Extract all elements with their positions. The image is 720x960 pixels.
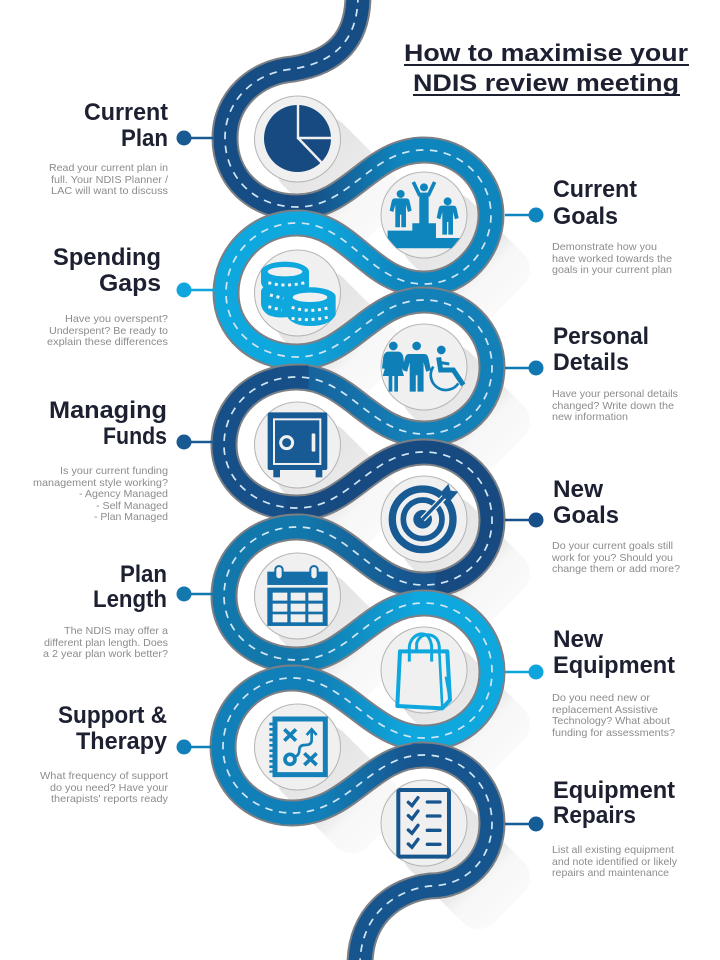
panel: equipment repairs: List all existing equipment xyxy=(552,844,674,856)
panel: new goals: New xyxy=(553,476,603,503)
panel: support and therapy: What frequency of support xyxy=(40,770,168,782)
panel: equipment repairs: Repairs xyxy=(553,802,636,829)
icon: strategy board xyxy=(271,719,325,775)
panel: plan length xyxy=(43,561,215,660)
panel: new goals: change them or add more? xyxy=(552,563,680,575)
panel: plan length: a 2 year plan work better? xyxy=(43,648,168,660)
panel: managing funds: - Self Managed xyxy=(96,500,168,512)
panel: new goals xyxy=(505,476,680,575)
panel: personal details: changed? Write down the xyxy=(552,400,674,412)
panel: support and therapy xyxy=(40,702,215,805)
panel: plan length: Plan xyxy=(120,561,167,588)
panel: personal details: Details xyxy=(553,349,629,376)
panel: spending gaps: Underspent? Be ready to xyxy=(49,325,168,337)
panel: plan length: Length xyxy=(93,586,167,613)
panel: current goals: goals in your current plan xyxy=(552,264,672,276)
panel: support and therapy: therapists' reports ready xyxy=(51,793,169,805)
panel: personal details: Personal xyxy=(553,323,649,350)
winding road xyxy=(223,0,492,960)
panel: new goals: Goals xyxy=(553,502,619,529)
panel: managing funds: - Agency Managed xyxy=(79,488,168,500)
panel: new equipment: Equipment xyxy=(553,652,675,679)
panel: plan length: different plan length. Does xyxy=(44,637,168,649)
panel: new equipment: Technology? What about xyxy=(552,715,670,727)
icon: people and wheelchair xyxy=(382,342,463,392)
panel: equipment repairs: Equipment xyxy=(553,777,675,804)
panel: support and therapy: do you need? Have your xyxy=(50,782,169,794)
panel: managing funds xyxy=(33,397,215,523)
panel: new goals: Do your current goals still xyxy=(552,540,673,552)
panel: current plan: Read your current plan in xyxy=(49,162,168,174)
panel: current plan xyxy=(49,99,215,197)
panel: new equipment: replacement Assistive xyxy=(552,704,658,716)
panel: personal details xyxy=(505,323,678,423)
panel: personal details: new information xyxy=(552,411,628,423)
panel: current goals: Demonstrate how you xyxy=(552,241,657,253)
panel: current plan: Current xyxy=(84,99,168,126)
icon: coins xyxy=(261,262,336,326)
title: NDIS review meeting xyxy=(413,70,679,97)
panel: spending gaps: Spending xyxy=(53,244,161,271)
icon: podium with people xyxy=(388,182,460,248)
panel: support and therapy: Therapy xyxy=(76,728,168,755)
panel: equipment repairs: and note identified or likely xyxy=(552,856,678,868)
icon circles xyxy=(254,96,467,866)
panel: current plan: full. Your NDIS Planner / xyxy=(51,174,168,186)
panel: support and therapy: Support & xyxy=(58,702,167,729)
panel: managing funds: - Plan Managed xyxy=(94,511,168,523)
panel: spending gaps xyxy=(47,244,215,348)
panel: new goals: work for you? Should you xyxy=(551,552,673,564)
panel: managing funds: management style working? xyxy=(33,477,168,489)
panel: managing funds: Managing xyxy=(49,397,167,424)
title: How to maximise your xyxy=(404,40,688,67)
panel: plan length: The NDIS may offer a xyxy=(64,625,168,637)
icon: target with arrow xyxy=(392,484,458,550)
panel: managing funds: Is your current funding xyxy=(60,465,168,477)
icon: shopping bag xyxy=(397,634,450,708)
panel: new equipment xyxy=(505,626,675,739)
icon: calendar xyxy=(267,566,328,626)
long shadows behind circles xyxy=(267,109,539,938)
panel: equipment repairs: repairs and maintenance xyxy=(552,867,669,879)
panel: new equipment: Do you need new or xyxy=(552,692,651,704)
panel: managing funds: Funds xyxy=(103,423,167,450)
panel: new equipment: New xyxy=(553,626,603,653)
panel: personal details: Have your personal details xyxy=(552,388,678,400)
panel: new equipment: funding for assessments? xyxy=(552,727,675,739)
panel: equipment repairs xyxy=(505,777,678,879)
panel: current goals xyxy=(505,176,672,276)
panel: current goals: Current xyxy=(553,176,637,203)
panel: current plan: Plan xyxy=(121,125,168,152)
icon: pie chart xyxy=(264,104,332,172)
panel: spending gaps: Have you overspent? xyxy=(65,313,168,325)
panel: current plan: LAC will want to discuss xyxy=(51,185,168,197)
panel: current goals: have worked towards the xyxy=(552,253,672,265)
icon: checklist xyxy=(398,790,449,857)
panel: current goals: Goals xyxy=(553,203,618,230)
panel: spending gaps: Gaps xyxy=(99,270,161,297)
title xyxy=(404,40,689,97)
panel: spending gaps: explain these differences xyxy=(47,336,168,348)
icon: safe xyxy=(268,412,327,477)
